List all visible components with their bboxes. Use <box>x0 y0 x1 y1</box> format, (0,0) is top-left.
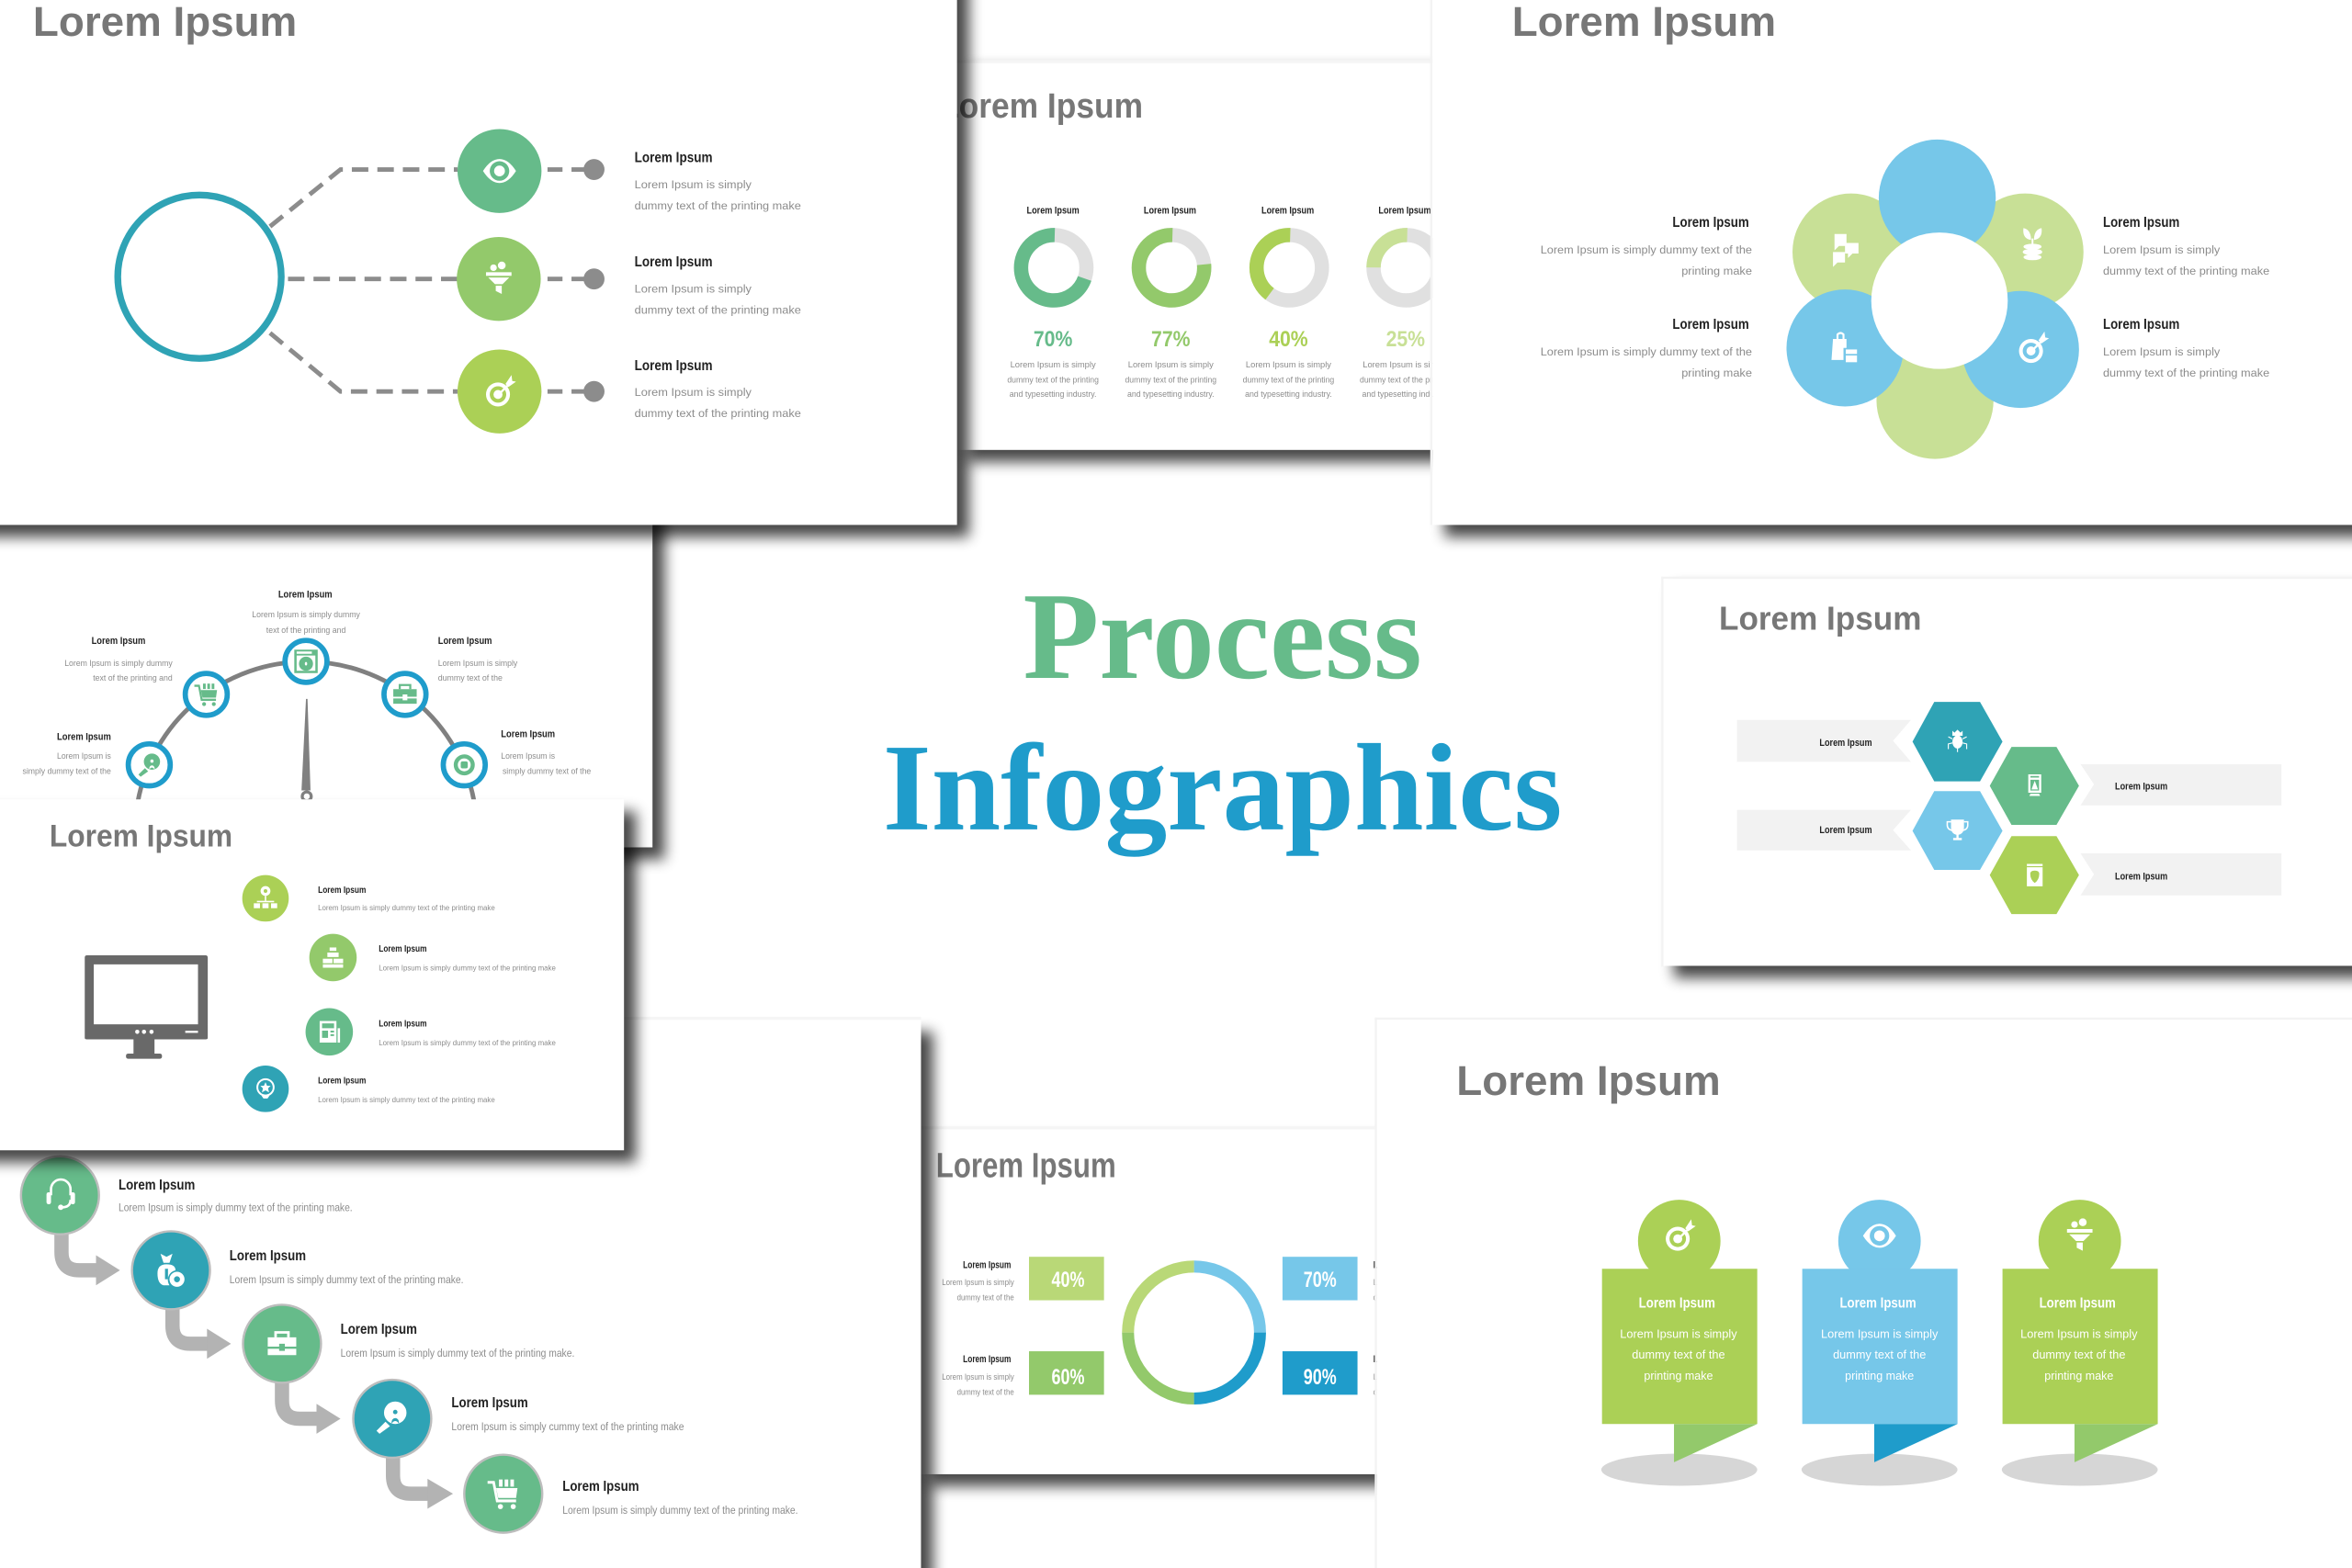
end dots <box>583 159 605 402</box>
box 90% <box>1283 1351 1358 1394</box>
banner 1: printing make <box>1644 1369 1713 1382</box>
donut column 70%: Lorem Ipsum is simply <box>1011 360 1096 370</box>
donut column 25%: dummy text of the printing <box>1360 375 1452 385</box>
item 4: Lorem Ipsum <box>318 1076 367 1086</box>
label lower left: Lorem Ipsum is <box>57 751 111 761</box>
main title: Process <box>1023 568 1422 705</box>
semicircle arc <box>138 661 474 803</box>
donut column 40%: and typesetting industry. <box>1245 389 1332 400</box>
step 3 text: Lorem Ipsum is simply dummy text of the printing make. <box>341 1347 574 1359</box>
item 4 <box>243 1066 495 1112</box>
dashed connectors <box>270 170 588 391</box>
text upper left: printing make <box>1681 265 1752 277</box>
text upper right: dummy text of the printing make <box>2103 265 2269 277</box>
panel: flower slide <box>1430 0 2352 537</box>
text lower right: Lorem Ipsum <box>2103 317 2179 333</box>
circle: eye <box>458 129 541 213</box>
banner 1: Lorem Ipsum <box>1639 1296 1715 1312</box>
step 4 text <box>451 1395 684 1433</box>
label bar left 2 <box>1737 810 1911 851</box>
step 2 circle <box>132 1231 210 1309</box>
hexagon green <box>1990 747 2079 825</box>
item 3: Lorem Ipsum is simply dummy text of the printing make <box>379 1038 556 1047</box>
label upper right: Lorem Ipsum is simply <box>438 659 518 669</box>
node: search <box>129 744 170 786</box>
label bar left 2: Lorem Ipsum <box>1819 825 1872 836</box>
arrow 2 <box>173 1306 231 1359</box>
box 40% <box>1029 1257 1104 1301</box>
step 4 circle <box>353 1380 431 1458</box>
donut column 77% <box>1125 206 1216 400</box>
label bar right 2 <box>2080 853 2281 896</box>
flower icons <box>1831 228 2049 363</box>
box 90%: 90% <box>1304 1365 1337 1390</box>
banner 2: printing make <box>1845 1369 1914 1382</box>
banner 2: dummy text of the <box>1833 1348 1926 1361</box>
panel: branching circles slide <box>0 0 969 537</box>
large ring <box>118 195 281 358</box>
donut column 77%: 77% <box>1151 327 1191 352</box>
item 2 <box>310 934 556 981</box>
arrow 1 <box>62 1233 120 1285</box>
item 2: Lorem Ipsum is simply dummy text of the printing make <box>379 963 556 972</box>
banner 1 <box>1601 1200 1758 1486</box>
step 5 text: Lorem Ipsum is simply dummy text of the printing make. <box>562 1504 798 1517</box>
node: gear <box>443 744 485 786</box>
banner 1: Lorem Ipsum is simply <box>1620 1326 1737 1340</box>
box 60%: 60% <box>1051 1365 1085 1390</box>
label lower left <box>22 732 111 776</box>
donut column 25%: Lorem Ipsum is simply <box>1363 360 1449 370</box>
text upper right: Lorem Ipsum <box>2103 215 2179 231</box>
node: cart <box>186 673 227 716</box>
box 40%: 40% <box>1051 1268 1085 1292</box>
text block 2: Lorem Ipsum is simply <box>635 282 752 295</box>
step 2 text: Lorem Ipsum <box>230 1248 306 1264</box>
heading: banner slide title: Lorem Ipsum <box>1456 1057 1721 1104</box>
text upper left: Lorem Ipsum is simply dummy text of the <box>1541 243 1752 256</box>
text lower right <box>2103 317 2269 379</box>
ring chart <box>1128 1267 1260 1398</box>
donut column 25%: 25% <box>1386 327 1425 352</box>
heading: ring slide title: Lorem Ipsum <box>936 1146 1116 1185</box>
box 60% <box>1029 1351 1104 1394</box>
panel: monitor slide <box>0 799 636 1162</box>
needle <box>301 699 311 801</box>
right labels: dummy text of the <box>1374 1293 1430 1303</box>
panel: donut charts slide <box>918 60 1463 462</box>
label bar left 1: Lorem Ipsum <box>1819 738 1872 749</box>
donut column 25% <box>1360 206 1452 400</box>
left labels: dummy text of the <box>957 1387 1014 1397</box>
donut column 40%: dummy text of the printing <box>1243 375 1334 385</box>
donut column 70%: 70% <box>1034 327 1073 352</box>
donut column 70%: Lorem Ipsum <box>1027 206 1080 217</box>
banner 3 <box>2002 1200 2158 1486</box>
label bar right 1 <box>2080 764 2281 806</box>
circle: funnel <box>457 237 541 321</box>
text block 1: Lorem Ipsum is simply <box>635 178 752 191</box>
donut column 40%: Lorem Ipsum <box>1261 206 1314 217</box>
text block 1 <box>635 151 801 212</box>
step 1 text: Lorem Ipsum is simply dummy text of the printing make. <box>119 1201 353 1213</box>
label top: Lorem Ipsum is simply dummy <box>252 610 360 620</box>
step 1 circle <box>21 1156 99 1235</box>
item 1: Lorem Ipsum is simply dummy text of the printing make <box>318 903 495 912</box>
text block 1: dummy text of the printing make <box>635 199 801 212</box>
label lower right: Lorem Ipsum is <box>501 751 555 761</box>
box 70% <box>1283 1257 1358 1301</box>
step 2 text <box>230 1248 463 1286</box>
step 3 text <box>341 1322 574 1359</box>
text block 1: Lorem Ipsum <box>635 151 713 166</box>
text block 2: Lorem Ipsum <box>635 254 713 270</box>
panel: ring chart slide <box>900 1126 1445 1486</box>
step 5 text: Lorem Ipsum <box>562 1479 639 1495</box>
step 3 text: Lorem Ipsum <box>341 1322 417 1337</box>
text lower left: Lorem Ipsum <box>1672 317 1749 333</box>
banner 3: printing make <box>2044 1369 2113 1382</box>
item 2: Lorem Ipsum <box>379 944 427 954</box>
banner 1: dummy text of the <box>1632 1348 1725 1361</box>
label lower right <box>501 728 591 776</box>
panel: hexagon slide <box>1661 577 2352 978</box>
donut column 77%: Lorem Ipsum is simply <box>1128 360 1214 370</box>
text lower left <box>1541 317 1752 379</box>
label lower right: Lorem Ipsum <box>501 728 555 739</box>
donut column 77%: and typesetting industry. <box>1127 389 1215 400</box>
left labels: Lorem Ipsum is simply <box>942 1278 1014 1288</box>
text block 3: dummy text of the printing make <box>635 407 801 420</box>
donut column 77%: Lorem Ipsum <box>1144 206 1196 217</box>
label bar right 2: Lorem Ipsum <box>2115 871 2167 882</box>
donut column 70% <box>1007 206 1099 400</box>
right labels: Lorem Ipsum <box>1374 1354 1421 1365</box>
right labels: Lorem Ipsum <box>1374 1259 1421 1270</box>
label upper left: Lorem Ipsum is simply dummy <box>64 659 173 669</box>
item 3: Lorem Ipsum <box>379 1019 427 1029</box>
circle: target <box>458 349 541 434</box>
hexagon blue <box>1913 791 2003 870</box>
item 3 <box>306 1009 556 1055</box>
hexagon lime <box>1990 836 2079 914</box>
node: briefcase <box>384 673 426 716</box>
donut column 70%: dummy text of the printing <box>1007 375 1099 385</box>
heading: hexagon slide title: Lorem Ipsum <box>1719 600 1921 637</box>
text upper left: Lorem Ipsum <box>1672 215 1749 231</box>
right labels <box>1374 1259 1445 1397</box>
panel: semicircle process slide <box>0 510 664 860</box>
item 4: Lorem Ipsum is simply dummy text of the printing make <box>318 1095 495 1104</box>
label bar left 1 <box>1737 720 1911 761</box>
node: gauge <box>285 640 327 682</box>
heading: monitor slide title: Lorem Ipsum <box>50 819 232 854</box>
text upper right: Lorem Ipsum is simply <box>2103 243 2221 256</box>
label upper right: Lorem Ipsum <box>438 636 492 647</box>
text lower right: Lorem Ipsum is simply <box>2103 345 2221 358</box>
step 1 text: Lorem Ipsum <box>119 1178 195 1193</box>
donut column 40%: Lorem Ipsum is simply <box>1246 360 1331 370</box>
text lower left: Lorem Ipsum is simply dummy text of the <box>1541 345 1752 358</box>
label top: text of the printing and <box>266 626 345 636</box>
icon: monitor <box>85 955 208 1059</box>
left labels: Lorem Ipsum is simply <box>942 1372 1014 1382</box>
banner 2: Lorem Ipsum <box>1839 1296 1917 1312</box>
main title <box>883 568 1562 857</box>
donut column 25%: and typesetting industry. <box>1362 389 1449 400</box>
label upper right: dummy text of the <box>438 673 503 683</box>
text lower left: printing make <box>1681 367 1752 379</box>
box 70%: 70% <box>1304 1268 1337 1292</box>
banner 2: Lorem Ipsum is simply <box>1821 1326 1939 1340</box>
left labels: dummy text of the <box>957 1293 1014 1303</box>
text block 3: Lorem Ipsum <box>635 358 713 374</box>
donut column 70%: and typesetting industry. <box>1010 389 1096 400</box>
banner 3: dummy text of the <box>2032 1348 2125 1361</box>
left labels: Lorem Ipsum <box>963 1259 1011 1270</box>
donut column 25%: Lorem Ipsum <box>1378 206 1431 217</box>
label lower right: simply dummy text of the <box>503 766 591 776</box>
label lower left: simply dummy text of the <box>22 766 111 776</box>
banner 3: Lorem Ipsum <box>2040 1296 2116 1312</box>
donut column 40%: 40% <box>1269 327 1308 352</box>
step 4 text: Lorem Ipsum is simply cummy text of the printing make <box>451 1420 684 1433</box>
arrow 3 <box>282 1382 341 1434</box>
step 5 circle <box>464 1455 542 1533</box>
label upper left <box>64 636 173 683</box>
label bar right 1: Lorem Ipsum <box>2115 781 2167 792</box>
right labels: dummy text of the <box>1374 1387 1430 1397</box>
text block 2 <box>635 254 801 316</box>
text upper right <box>2103 215 2269 277</box>
text block 2: dummy text of the printing make <box>635 303 801 316</box>
label upper left: text of the printing and <box>93 673 173 683</box>
left labels: Lorem Ipsum <box>963 1354 1011 1365</box>
right labels: Lorem Ipsum is simply <box>1374 1372 1445 1382</box>
arrow 4 <box>393 1456 453 1508</box>
item 1: Lorem Ipsum <box>318 886 367 896</box>
donut column 40% <box>1243 206 1334 400</box>
text block 3 <box>635 358 801 420</box>
banner 3: Lorem Ipsum is simply <box>2020 1326 2138 1340</box>
left labels <box>942 1259 1014 1397</box>
step 4 text: Lorem Ipsum <box>451 1395 528 1411</box>
label lower left: Lorem Ipsum <box>57 732 111 743</box>
flower petals <box>1786 140 2084 459</box>
right labels: Lorem Ipsum is simply <box>1374 1278 1445 1288</box>
step 1 text <box>119 1178 353 1213</box>
step 2 text: Lorem Ipsum is simply dummy text of the printing make. <box>230 1273 463 1286</box>
main title: Infographics <box>883 719 1562 857</box>
donut column 77%: dummy text of the printing <box>1125 375 1216 385</box>
banner 2 <box>1802 1200 1958 1486</box>
label upper left: Lorem Ipsum <box>92 636 145 647</box>
hexagon teal <box>1913 702 2003 782</box>
text block 3: Lorem Ipsum is simply <box>635 386 752 399</box>
panel: staircase process slide <box>0 1017 933 1568</box>
text upper left <box>1541 215 1752 277</box>
label top: Lorem Ipsum <box>278 589 333 600</box>
text lower right: dummy text of the printing make <box>2103 367 2269 379</box>
label top <box>252 589 360 636</box>
step 5 text <box>562 1479 798 1517</box>
step 3 circle <box>243 1304 321 1382</box>
item 1 <box>243 875 495 921</box>
heading: donut slide title: Lorem Ipsum <box>939 86 1143 125</box>
label upper right <box>438 636 518 683</box>
panel: banner slide <box>1374 1018 2352 1568</box>
